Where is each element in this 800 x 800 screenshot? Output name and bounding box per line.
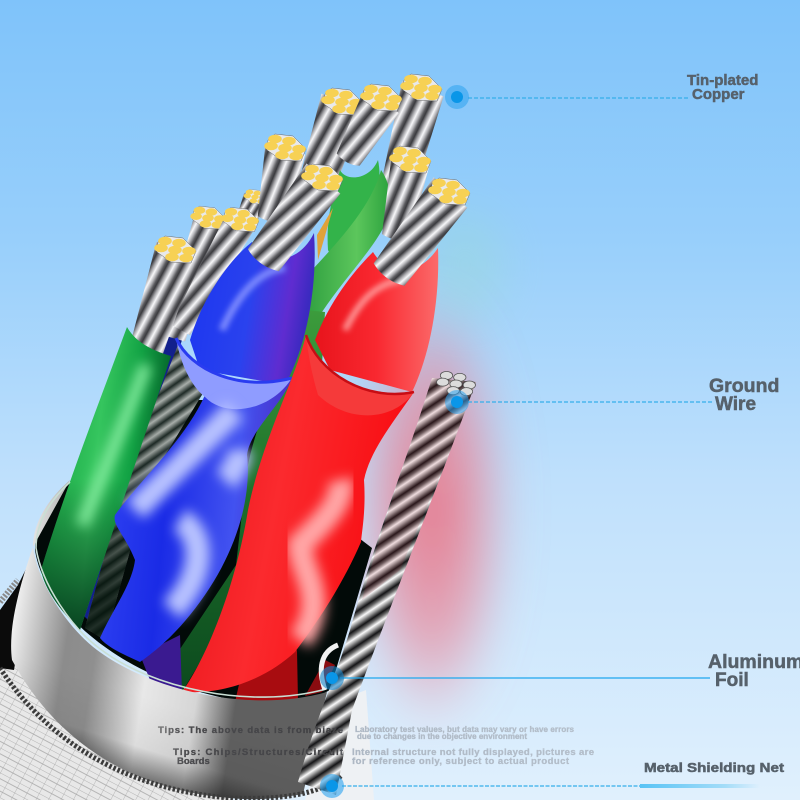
foil curl at back [321, 645, 338, 690]
callout: tin-plated copper [445, 72, 758, 109]
back conductor strands [232, 74, 445, 235]
footnote tips: Laboratory test values, but data may vary or have errors [355, 725, 575, 734]
rear amber insulation sliver [317, 208, 333, 260]
footnote tips: due to changes in the objective environment [357, 732, 527, 741]
ground wire cap [437, 371, 475, 396]
dark red edge [305, 660, 335, 696]
red skirt fold [306, 335, 414, 415]
strand bundle: upper left [252, 134, 306, 226]
callout: metal shielding net: Metal Shielding Net [644, 760, 785, 775]
callout: aluminum foil: Foil [715, 670, 749, 691]
braid right section [305, 690, 374, 800]
blue lower dark tail [140, 635, 182, 692]
braid rear rim [0, 580, 18, 602]
dark green back wire [176, 310, 325, 692]
callout: tin-plated copper: Tin-plated [687, 72, 758, 89]
strand bundle: red front [370, 177, 470, 292]
aluminum foil band [0, 480, 342, 799]
blue collar rim [176, 338, 292, 382]
strand bundle: top centre [295, 88, 366, 195]
blue skirt fold [176, 338, 292, 409]
strand bundle: far left rear [160, 206, 226, 343]
foil inner rim [36, 482, 326, 697]
strand bundles: left rear [160, 206, 259, 343]
teal tint behind strands [425, 210, 505, 320]
cable mouth interior [35, 400, 372, 706]
strand bundle: small rear [232, 189, 267, 235]
red upper sleeve [315, 248, 438, 392]
footnote tips [158, 725, 594, 767]
strand bundle: twisted top [330, 84, 402, 173]
callout: ground wire: Wire [715, 394, 756, 415]
footnote tips: Tips: The above data is from biaze [158, 725, 343, 736]
strand bundle: blue front [244, 163, 343, 277]
callout: ground wire: Ground [709, 375, 779, 397]
blue upper sleeve [190, 233, 315, 385]
green front wire [41, 327, 171, 630]
red highlight [300, 480, 341, 640]
callout: ground wire [445, 375, 779, 415]
blue wire [100, 233, 315, 692]
braid mesh [0, 640, 230, 800]
callout: aluminum foil [320, 651, 800, 691]
blue lower body [100, 378, 292, 662]
strand bundle: left rear [166, 207, 259, 338]
ground wire [298, 371, 476, 795]
green swoosh [305, 170, 391, 320]
green collar [328, 160, 380, 252]
red collar rim [306, 335, 414, 394]
dark blue rear shadow [78, 320, 182, 620]
red wire [182, 248, 438, 702]
inner twisted strand [85, 345, 208, 640]
footnote tips: Boards [177, 756, 210, 767]
blue highlight [135, 410, 240, 610]
footnote tips: Internal structure not fully displayed, pictures are [352, 747, 594, 758]
callout: tin-plated copper: Copper [692, 86, 745, 103]
strand bundle: top right [377, 74, 445, 194]
braid bead edge [0, 668, 342, 798]
footnote tips: Tips: Chips/Structures/Circuit [173, 747, 344, 758]
strand bundle: mid right [377, 146, 431, 243]
callout: metal shielding net [320, 760, 785, 798]
red lower dark tail [235, 650, 298, 702]
footnote tips: for reference only, subject to actual product [352, 756, 570, 767]
back green wires [176, 160, 391, 692]
braided shield [0, 580, 374, 800]
red lower body [182, 335, 414, 692]
red glow behind wire [354, 285, 510, 735]
strand bundle: left front [126, 236, 198, 359]
